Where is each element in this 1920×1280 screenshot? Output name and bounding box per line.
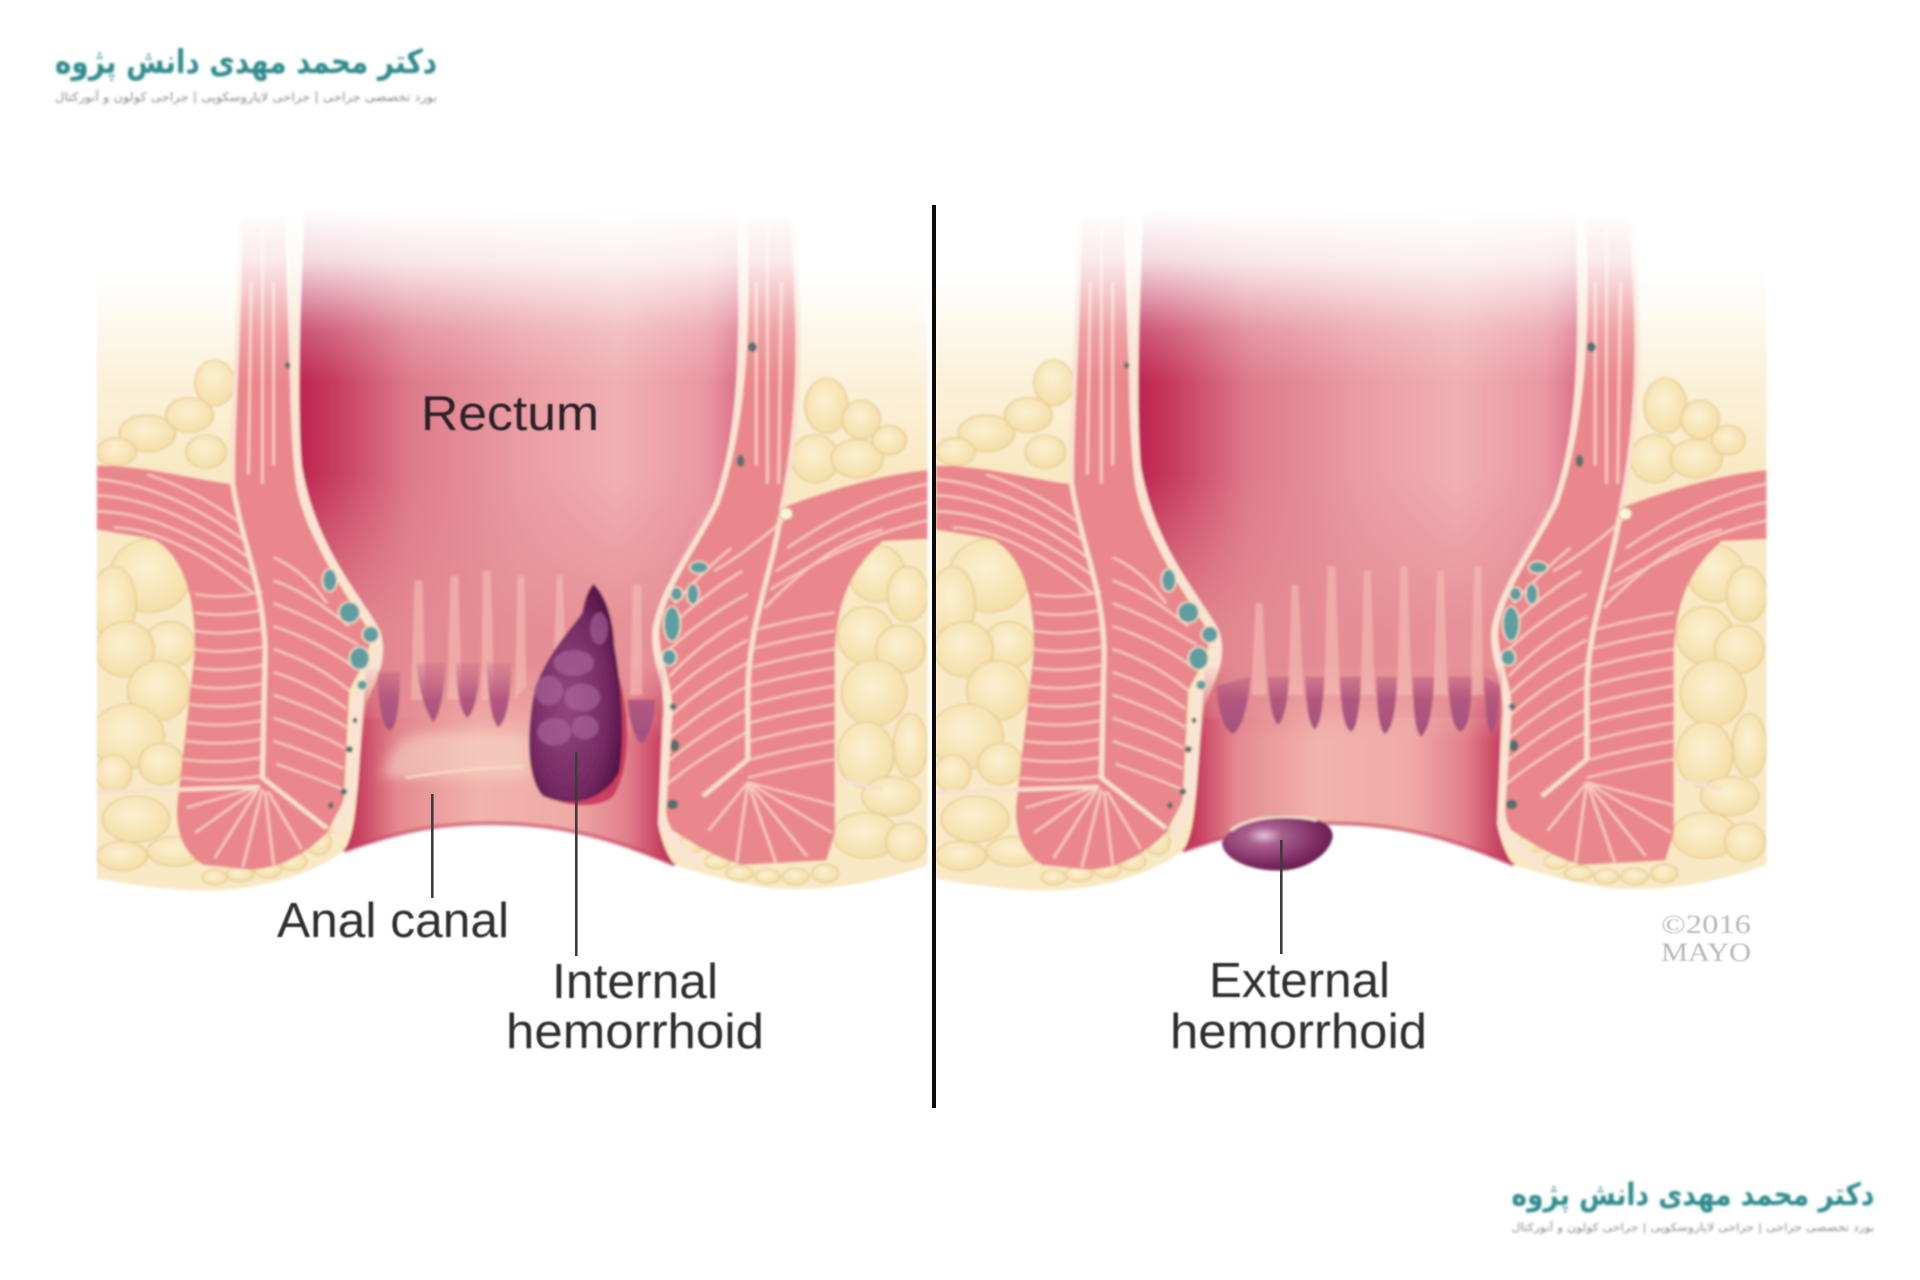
- leader line: anal canal: [431, 794, 434, 898]
- logo: top left: بورد تخصصی جراحی | جراحی لاپاروسکوپی | جراحی کولون و آنورکتال: [55, 89, 437, 105]
- logo: bottom right: [1512, 1177, 1874, 1234]
- logo: bottom right: بورد تخصصی جراحی | جراحی لاپاروسکوپی | جراحی کولون و آنورکتال: [1512, 1220, 1874, 1234]
- leader line: external hemorrhoid: [1280, 840, 1283, 954]
- divider line: [932, 205, 936, 1108]
- anal columns: [377, 571, 655, 778]
- label: Internal hemorrhoid: Internal: [552, 955, 718, 1009]
- label: Internal hemorrhoid: [506, 955, 764, 1059]
- logo: top left: [55, 42, 437, 105]
- left tissue cross-section: [80, 190, 944, 891]
- copyright note: [1661, 910, 1751, 967]
- right tissue cross-section: [919, 190, 1783, 891]
- logo: top left: دکتر محمد مهدی دانش پژوه: [55, 42, 437, 82]
- icon: external hemorrhoid: [1222, 815, 1333, 871]
- copyright note: ©2016: [1661, 910, 1751, 939]
- label: Anal canal: Anal canal: [277, 894, 509, 948]
- label: Rectum: Rectum: [421, 387, 599, 441]
- leader line: internal hemorrhoid: [575, 752, 578, 956]
- label: Internal hemorrhoid: hemorrhoid: [506, 1005, 764, 1059]
- label: External hemorrhoid: hemorrhoid: [1170, 1005, 1427, 1059]
- panel: external hemorrhoid illustration: [919, 190, 1783, 891]
- label: External hemorrhoid: [1170, 954, 1427, 1059]
- anal columns: [1216, 567, 1500, 736]
- icon: internal hemorrhoid: [529, 584, 627, 805]
- copyright note: MAYO: [1661, 938, 1751, 967]
- label: External hemorrhoid: External: [1209, 954, 1390, 1008]
- panel: internal hemorrhoid illustration: [80, 190, 944, 891]
